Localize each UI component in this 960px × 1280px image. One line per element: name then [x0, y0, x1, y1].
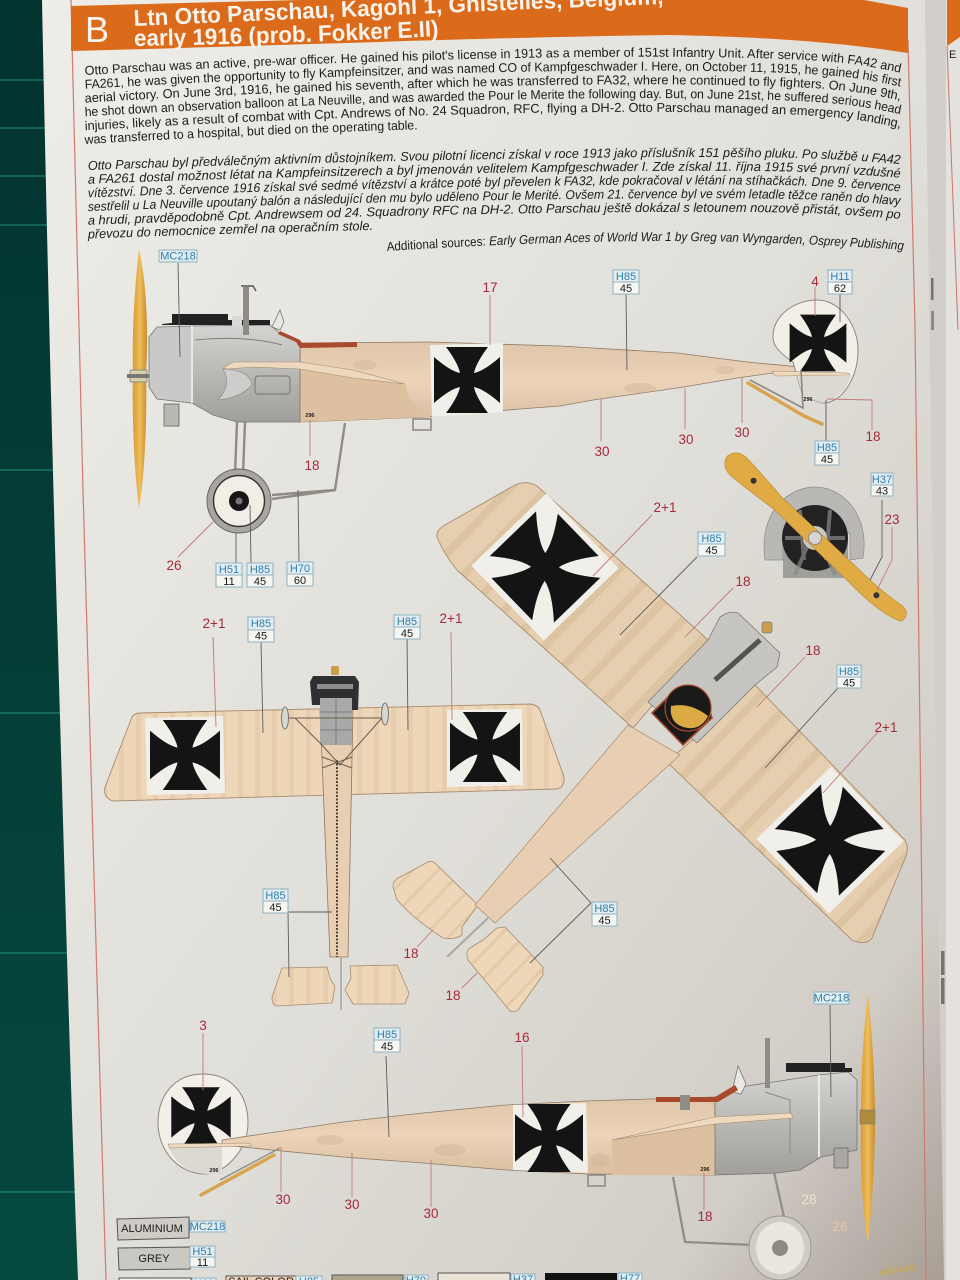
- landing gear: [673, 1172, 784, 1245]
- H37 swatch: [438, 1273, 535, 1280]
- 26 callout: [166, 522, 213, 573]
- fuselage weathering: [353, 360, 735, 413]
- 30 callouts: [275, 1147, 439, 1221]
- 4 callout: 4: [811, 274, 819, 289]
- H85 rudder callout: H85: [817, 442, 837, 454]
- H85 right callout: 45: [401, 628, 413, 640]
- English biography text: [84, 47, 902, 144]
- 30 callouts: [594, 377, 750, 459]
- 30 callouts: 30: [594, 444, 610, 459]
- 2+1 left callout: [203, 616, 225, 727]
- fuselage: [300, 342, 800, 422]
- 16 callout: [514, 1030, 530, 1117]
- H85 right callout: H85: [839, 666, 859, 678]
- right side profile aircraft: [158, 993, 875, 1280]
- MC218 callout: MC218: [814, 992, 849, 1004]
- 18 tail callouts: [403, 930, 477, 1003]
- rudder: 296: [209, 1168, 219, 1174]
- MC218 callout: [159, 250, 197, 357]
- cowl: [310, 666, 359, 745]
- H85 callout: [620, 532, 725, 635]
- H77 swatch: [545, 1273, 642, 1280]
- H51 callout: H51: [219, 564, 239, 576]
- plan view callouts: [203, 611, 462, 977]
- aluminium swatch: MC218: [190, 1221, 225, 1233]
- H85 fuselage callout: H85: [265, 890, 286, 902]
- engine cowl: [715, 1072, 857, 1175]
- English biography text: was transferred to a hospital, but died on the operating table.: [84, 120, 417, 144]
- H85 callout: 45: [705, 545, 718, 557]
- H85 left callout: 45: [255, 630, 267, 642]
- 30 callouts: 30: [423, 1206, 439, 1221]
- propeller: [127, 249, 149, 508]
- engine cowling: [192, 325, 300, 422]
- left profile callouts: [159, 250, 881, 588]
- windscreen: [272, 310, 284, 330]
- H85 fuselage callout: [263, 889, 332, 977]
- 2+1 right callout: [823, 720, 897, 793]
- H37 callout: H37: [872, 474, 892, 486]
- next page and gutter: E: [949, 49, 956, 61]
- H85 fuselage and tail callout: 45: [598, 915, 611, 927]
- H85 fuselage callout: 45: [620, 283, 632, 295]
- front view callouts: [870, 473, 900, 590]
- 18 tail callouts: 18: [403, 946, 419, 961]
- rudder: 296: [803, 397, 813, 403]
- red coaming tube: [278, 331, 357, 348]
- additional sources note: Additional sources: Early German Aces of World War 1 by Greg van Wyngarden, Osprey Publishing: [387, 232, 904, 252]
- H85 callout: [374, 1028, 400, 1137]
- H85 callout: H85: [701, 533, 722, 545]
- landing gear: [235, 422, 345, 499]
- gun post: [243, 287, 249, 335]
- 30 callouts: 30: [275, 1192, 291, 1207]
- publisher mark: eduard: [878, 1261, 917, 1279]
- 18 callout: [685, 574, 751, 637]
- Czech biography text: a FA261 dostal možnost létat na Kampfeinsitzerech a byl jmenován velitelem Kampfgeschwader I. Zde získal 11. října 1915 své první vzdušné: [88, 161, 900, 184]
- H37 callout: 43: [876, 486, 888, 498]
- 3 callout: 3: [199, 1018, 207, 1033]
- fuselage cross marking: [513, 1103, 588, 1173]
- H85 right callout: [394, 615, 420, 730]
- right side profile aircraft: 296: [700, 1167, 710, 1173]
- cabane wires: [285, 718, 382, 768]
- Czech biography text: Otto Parschau byl předválečným aktivním důstojníkem. Svou pilotní licenci získal v roce 1913 jako příslušník 151 pěšího pluku. Po službě u FA42: [88, 148, 901, 170]
- fuselage: [320, 710, 353, 957]
- tailplane: [168, 1143, 251, 1148]
- H85 left callout: H85: [251, 618, 271, 630]
- MC218 callout: [814, 992, 849, 1097]
- tailplanes: [272, 965, 409, 1006]
- filler cap: [762, 622, 772, 633]
- H85 callout: 45: [254, 576, 266, 588]
- right wing: [667, 685, 907, 943]
- H11 swatch: [119, 1278, 216, 1280]
- left wing cross: [145, 716, 225, 795]
- top view aircraft (oblique): [393, 483, 907, 1012]
- English biography text: he shot down an observation balloon at La Neuville, and was awarded the Pour le Merite the following day. But, on June 21st, he suffered serious head: [85, 88, 902, 116]
- front view propeller and engine: [719, 447, 911, 629]
- H85 left callout: [248, 617, 274, 733]
- grey swatch: [118, 1246, 215, 1270]
- gun: [786, 1063, 852, 1072]
- H85 fuselage callout: [613, 270, 639, 370]
- tail skid: [447, 918, 488, 957]
- wheel: [749, 1216, 811, 1280]
- right profile callouts: [199, 992, 917, 1279]
- 18 right callout: [757, 643, 821, 707]
- fuselage: [222, 1097, 715, 1175]
- H85 callout: [247, 505, 273, 588]
- aluminium swatch: [117, 1217, 225, 1240]
- cowl ring: [764, 487, 864, 560]
- 2+1 right callout: 2+1: [875, 720, 897, 735]
- 30 callouts: 30: [344, 1197, 360, 1212]
- 23 callout: 23: [884, 512, 900, 527]
- H85 rudder callout: [815, 400, 839, 466]
- rudder skid: [340, 957, 342, 1010]
- English biography text: Otto Parschau was an active, pre-war officer. He gained his pilot's license in 1913 as a member of 151st Infantry Unit. After service with FA42 and: [85, 47, 902, 75]
- H85 fuselage callout: 45: [269, 902, 282, 914]
- header band: [71, 0, 908, 53]
- plan view aircraft: [105, 666, 564, 1010]
- H85 rudder callout: 45: [821, 454, 833, 466]
- H85 callout: H85: [377, 1029, 397, 1041]
- faint 28 and 26 callouts: 26: [832, 1219, 848, 1234]
- 2+1 right callout: 2+1: [440, 611, 462, 626]
- MC218 callout: MC218: [160, 250, 196, 262]
- fuselage: [475, 725, 680, 923]
- right wing cross: [447, 709, 523, 787]
- English biography text: aerial victory. On June 3rd, 1916, he gained his seventh, after which he was transferred to FA32, where he continued to fly fighters. On June 9th,: [85, 75, 900, 103]
- H11 callout: [828, 270, 852, 322]
- 4 callout: [811, 274, 819, 316]
- H85 right callout: H85: [397, 616, 417, 628]
- left wing cross: [471, 493, 619, 641]
- H70 callout: 60: [294, 575, 306, 587]
- H51 callout: 11: [223, 576, 235, 588]
- 18 callout: 18: [735, 574, 751, 589]
- 18 callout: [304, 420, 320, 473]
- English biography text: injuries, likely as a result of combat with Cpt. Andrews of No. 24 Squadron, RFC, flying a DH-2. Otto Parschau managed an emergency landing,: [85, 102, 900, 132]
- grey swatch: 11: [197, 1257, 208, 1269]
- machine gun: [162, 314, 270, 325]
- H70 swatch: [332, 1275, 428, 1280]
- 16 callout: 16: [514, 1030, 530, 1045]
- next page and gutter: [920, 0, 960, 1280]
- wing root: [612, 1124, 715, 1175]
- Czech biography text: [88, 148, 902, 242]
- H85 callout: 45: [381, 1041, 393, 1053]
- 18 tail callout: 18: [865, 429, 881, 444]
- Czech biography text: převozu do nemocnice zemřel na operačním stole.: [88, 220, 372, 242]
- red coaming tube: [656, 1085, 738, 1102]
- gun: [715, 640, 760, 680]
- wing: [612, 1113, 793, 1140]
- grey swatch: GREY: [138, 1253, 170, 1265]
- Czech biography text: a hrudi, pravděpodobně Cpt. Andrewsem od 24. Squadrony RFC na DH-2. Otto Parschau ještě dokázal s letounem nouzově přistát, ovšem po: [88, 202, 900, 226]
- H85 fuselage and tail callout: H85: [594, 903, 615, 915]
- cowling cheek: [218, 369, 252, 400]
- H51 callout: [216, 533, 242, 588]
- wing root: [300, 369, 430, 422]
- left side profile aircraft: [127, 249, 858, 533]
- rudder: [158, 1074, 248, 1174]
- 2+1 left callout: 2+1: [203, 616, 225, 631]
- grey swatch: H51: [192, 1246, 213, 1258]
- H37 callout: [870, 473, 893, 580]
- right wing cross: [756, 766, 904, 914]
- 26 callout: 26: [166, 558, 182, 573]
- fuselage weathering: [316, 1135, 610, 1167]
- 2+1 callout: 2+1: [654, 500, 676, 515]
- H85 fuselage callout: H85: [616, 271, 636, 283]
- 18 callout: [697, 1173, 713, 1224]
- H85 right callout: [765, 665, 861, 768]
- cockpit: [652, 685, 712, 745]
- faint 28 and 26 callouts: [801, 1192, 848, 1234]
- tailplane: [772, 371, 850, 376]
- 30 callouts: 30: [678, 432, 694, 447]
- oblique view callouts: [403, 500, 897, 1003]
- 17 callout: 17: [482, 280, 498, 295]
- 18 callout: 18: [304, 458, 320, 473]
- 18 right callout: 18: [805, 643, 821, 658]
- interplane posts: [282, 707, 288, 729]
- sail color swatch: [226, 1276, 322, 1280]
- H85 callout: H85: [250, 564, 270, 576]
- colour legend: [117, 1217, 642, 1280]
- bracing wire: [336, 760, 338, 957]
- Czech biography text: sestřelil u La Neuville upoutaný balón a následující den mu bylo uděleno Pour le Merité. Ovšem 21. července byl ve svém letadle těžce raněn do hlavy: [88, 188, 902, 212]
- engine interior: [782, 505, 848, 571]
- 18 callout: 18: [697, 1209, 713, 1224]
- H70 callout: [287, 490, 313, 587]
- fuselage cross marking: [430, 343, 503, 417]
- 17 callout: [482, 280, 498, 345]
- propeller: [860, 993, 875, 1243]
- wheel: [207, 469, 271, 533]
- 2+1 right callout: [440, 611, 462, 720]
- rudder: [772, 300, 858, 403]
- exhaust: [834, 1148, 848, 1168]
- serial number: 296: [305, 413, 315, 419]
- H11 callout: H11: [830, 271, 850, 283]
- 18 tail callout: [827, 399, 881, 444]
- subtitle: early 1916 (prob. Fokker E.II): [134, 20, 438, 50]
- 2+1 callout: [593, 500, 676, 576]
- exhaust: [164, 404, 179, 426]
- 3 callout: [199, 1018, 207, 1090]
- wing: [223, 362, 405, 384]
- tail skid: [201, 1148, 280, 1195]
- engine cowl: [648, 612, 780, 743]
- 30 callouts: 30: [734, 425, 750, 440]
- wing: [105, 704, 564, 801]
- tailplanes: [393, 861, 543, 1012]
- aluminium swatch: ALUMINIUM: [121, 1223, 183, 1235]
- windscreen: [732, 1066, 746, 1094]
- propeller blade: [719, 447, 911, 629]
- H11 callout: 62: [834, 283, 846, 295]
- H70 callout: H70: [290, 563, 310, 575]
- H85 right callout: 45: [843, 678, 855, 690]
- left wing: [437, 483, 708, 728]
- 18 tail callouts: 18: [445, 988, 461, 1003]
- English biography text: FA261, he was given the opportunity to fly Kampfeinsitzer, and was named CO of Kampfgeschwader I. Here, on October 11, 1915, he gained his first: [86, 61, 902, 89]
- Czech biography text: vítězství. Dne 3. července 1916 získal své sedmé vítězství a krátce poté byl převelen k FA32, kde pokračoval v létání na stíhačkách. Dne 9. července: [88, 175, 900, 198]
- gun post: [765, 1038, 770, 1088]
- tail skid: [748, 383, 822, 424]
- H85 fuselage and tail callout: [530, 858, 617, 963]
- faint 28 and 26 callouts: 28: [801, 1192, 817, 1207]
- profile letter: B: [85, 9, 109, 50]
